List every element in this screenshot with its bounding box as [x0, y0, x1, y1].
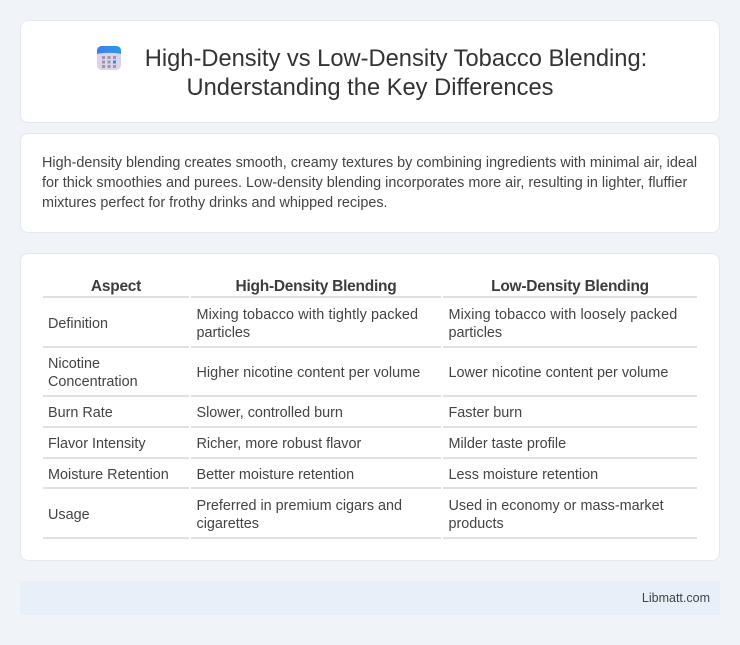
row: burn rate: Slower, controlled burn	[196, 405, 343, 421]
row: definition: Mixing tobacco with loosely packed	[448, 307, 677, 323]
intro text	[42, 155, 697, 211]
row: burn rate	[48, 405, 522, 421]
row: usage: Used in economy or mass-market	[448, 498, 664, 514]
panel: comparison table	[20, 253, 720, 561]
table header: High-Density Blending	[236, 278, 396, 295]
footer	[20, 581, 720, 615]
intro text: for thick smoothies and purees. Low-density blending incorporates more air, resulting in lighter, fluffier	[42, 175, 687, 191]
intro text: High-density blending creates smooth, creamy textures by combining ingredients with minimal air, ideal	[42, 155, 697, 171]
row: flavor intensity: Richer, more robust flavor	[196, 436, 361, 452]
row: usage	[48, 498, 664, 532]
row: nicotine concentration: Higher nicotine content per volume	[196, 365, 420, 381]
row: moisture retention: Better moisture retention	[196, 467, 354, 483]
row: usage: Usage	[48, 507, 90, 523]
footer brand: Libmatt.com	[642, 591, 710, 605]
row: definition: particles	[196, 325, 250, 341]
row: usage: products	[448, 516, 504, 532]
row: moisture retention: Moisture Retention	[48, 467, 169, 483]
icon: calendar	[97, 46, 121, 70]
row: definition: Definition	[48, 316, 108, 332]
row: flavor intensity: Flavor Intensity	[48, 436, 146, 452]
row: burn rate: Burn Rate	[48, 405, 113, 421]
row: nicotine concentration: Lower nicotine content per volume	[448, 365, 668, 381]
row: burn rate: Faster burn	[448, 405, 522, 421]
intro text: mixtures perfect for frothy drinks and whipped recipes.	[42, 195, 388, 211]
row: flavor intensity	[48, 436, 566, 452]
row: nicotine concentration: Concentration	[48, 374, 138, 390]
row: definition: particles	[448, 325, 502, 341]
row: moisture retention: Less moisture retention	[448, 467, 598, 483]
row: nicotine concentration: Nicotine	[48, 356, 100, 372]
row: nicotine concentration	[48, 356, 668, 390]
table header: Low-Density Blending	[491, 278, 649, 295]
panel: intro	[20, 133, 720, 233]
panel: title	[20, 20, 720, 123]
table header	[91, 278, 649, 295]
table header: Aspect	[91, 278, 141, 295]
row: definition: Mixing tobacco with tightly packed	[196, 307, 418, 323]
row: flavor intensity: Milder taste profile	[448, 436, 566, 452]
row: usage: Preferred in premium cigars and	[196, 498, 402, 514]
title text: Understanding the Key Differences	[187, 75, 553, 101]
title text: High-Density vs Low-Density Tobacco Blending:	[145, 46, 647, 72]
row: usage: cigarettes	[196, 516, 259, 532]
title text	[145, 46, 647, 101]
row: definition	[48, 307, 677, 341]
row: moisture retention	[48, 467, 598, 483]
